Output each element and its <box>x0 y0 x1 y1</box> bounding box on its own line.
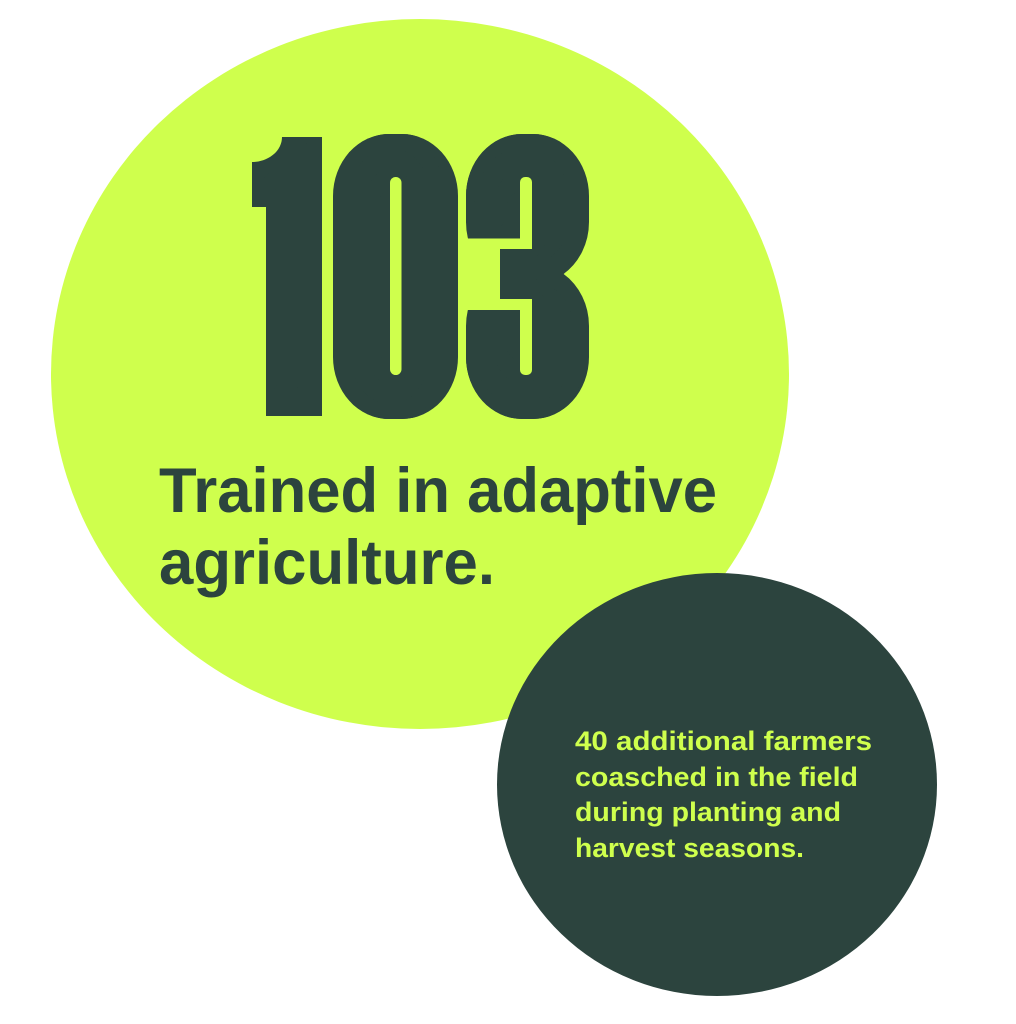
digit 3 <box>466 134 589 419</box>
caption: additional farmers coached: coasched in the field <box>575 762 858 792</box>
digit 0: 0 <box>325 58 456 495</box>
heading: trained in adaptive agriculture <box>159 456 717 598</box>
caption: additional farmers coached: 40 additional farmers <box>575 726 872 756</box>
dark circle <box>497 573 937 996</box>
digit 1 <box>252 137 322 416</box>
caption: additional farmers coached: harvest seasons. <box>575 833 804 863</box>
digit 3: 3 <box>458 58 589 495</box>
digit 0 <box>333 134 458 419</box>
lime circle <box>51 19 789 729</box>
heading: trained in adaptive agriculture: agriculture. <box>159 528 495 598</box>
caption: additional farmers coached: during planting and <box>575 797 841 827</box>
big number 103 <box>252 134 589 419</box>
digit 1: 1 <box>215 72 346 497</box>
caption: additional farmers coached <box>575 726 872 863</box>
heading: trained in adaptive agriculture: Trained in adaptive <box>159 456 717 526</box>
